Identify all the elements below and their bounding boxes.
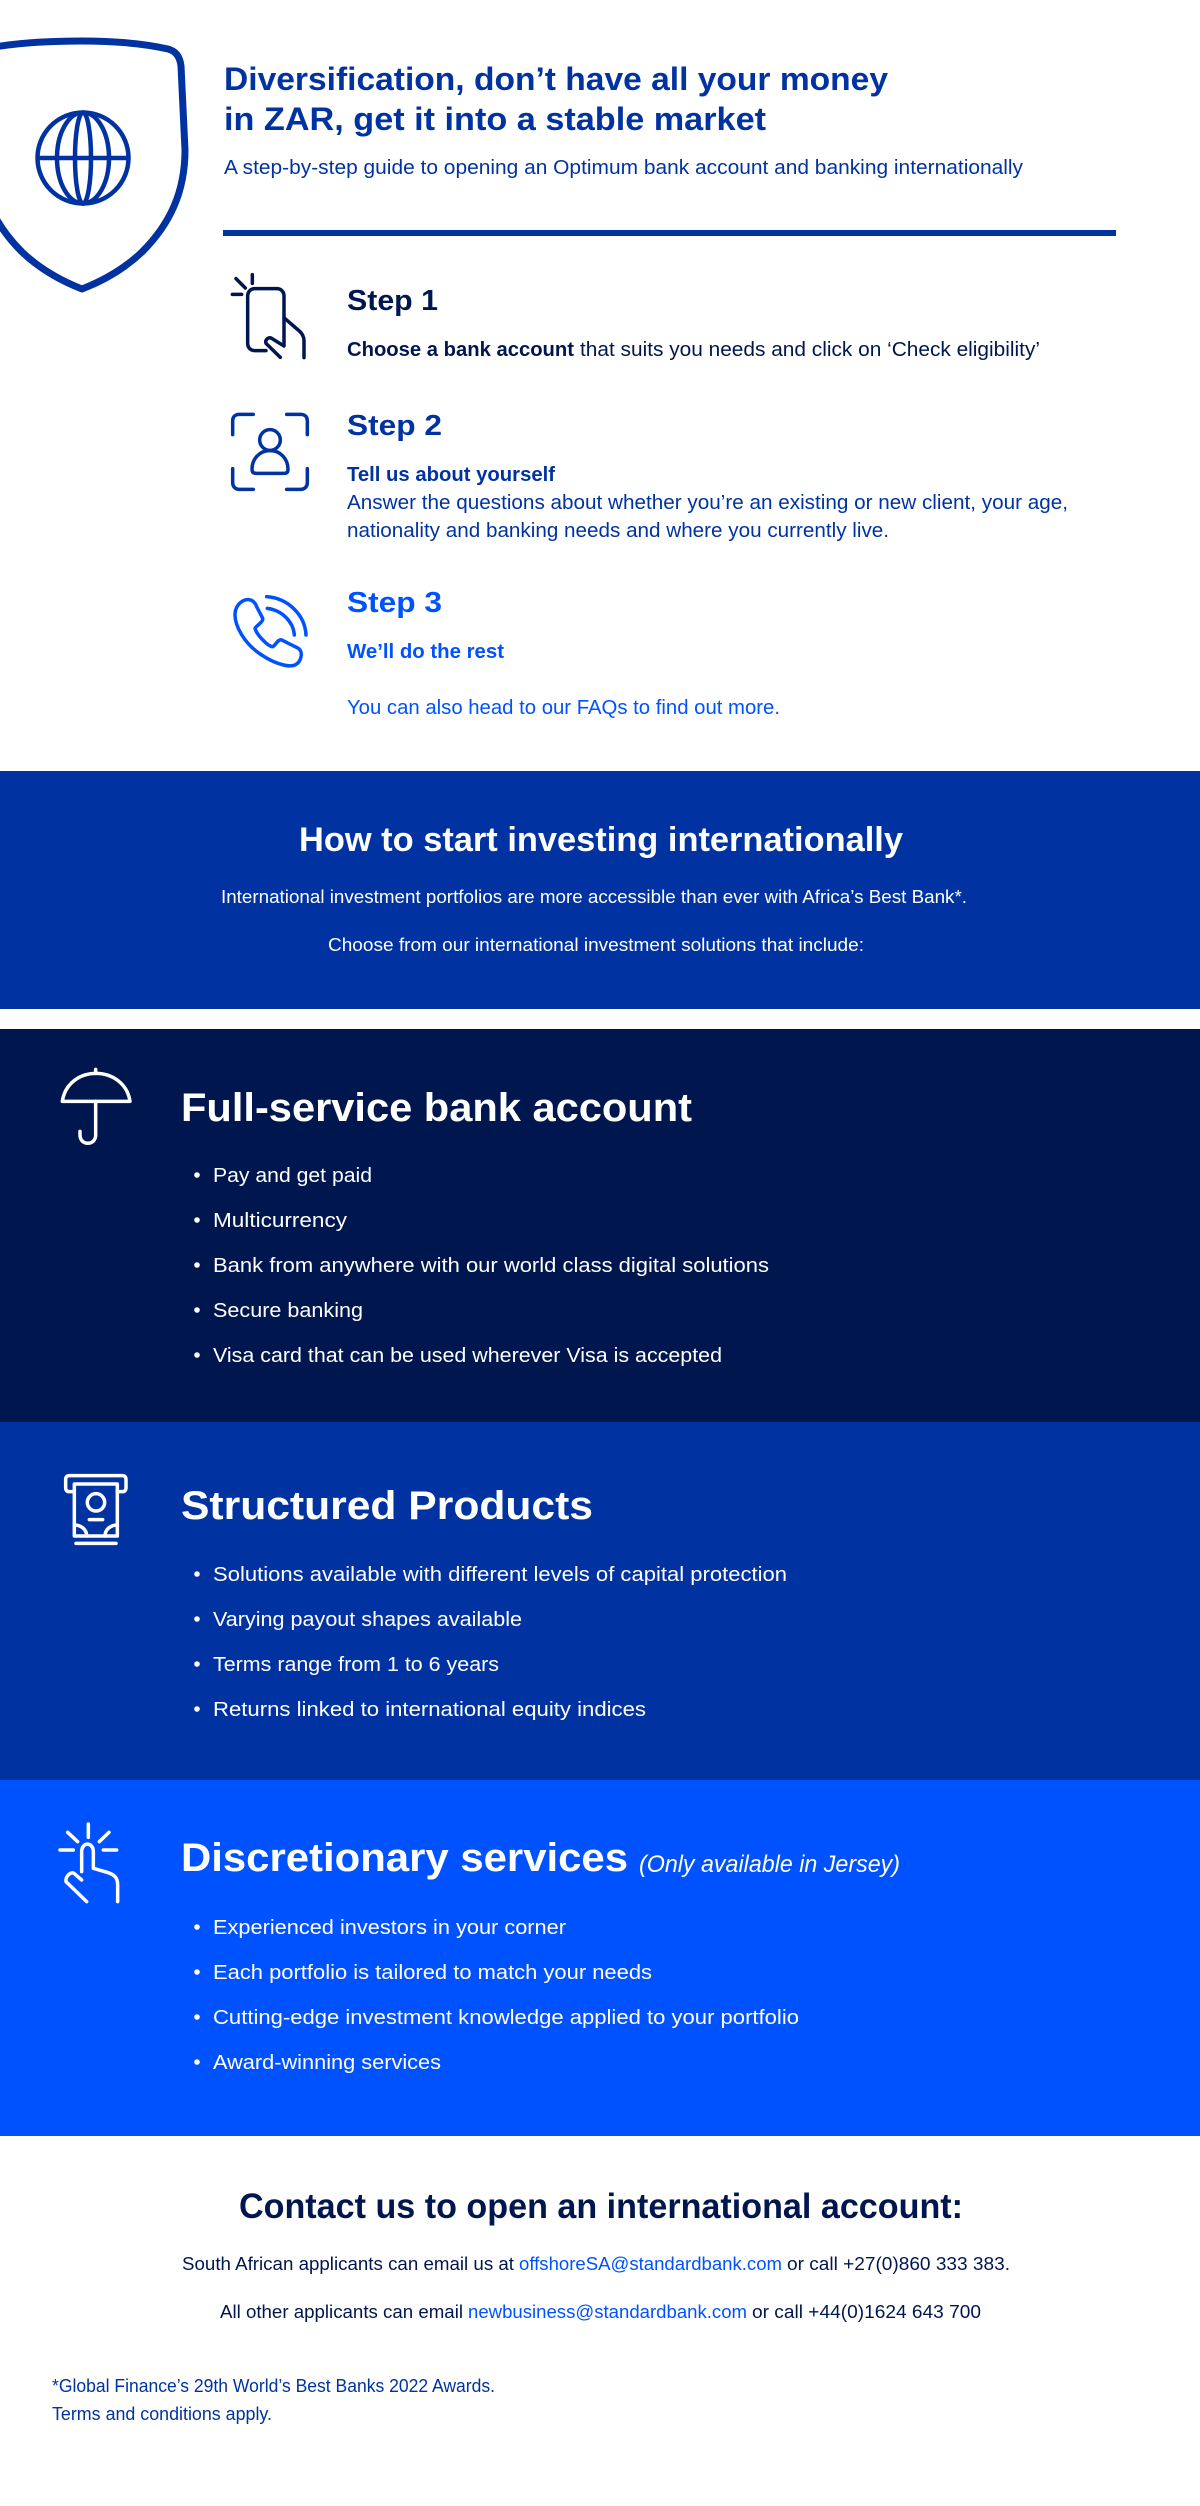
icon: shield with globe <box>0 41 185 289</box>
panel heading: How to start investing internationally <box>299 821 903 859</box>
heading <box>181 1836 900 1880</box>
heading: Structured Products <box>181 1484 593 1528</box>
bullet list: Terms range from 1 to 6 years <box>213 1654 499 1676</box>
bullet list: Cutting-edge investment knowledge applied to your portfolio <box>213 2007 799 2029</box>
heading: (Only available in Jersey) <box>639 1851 900 1878</box>
title: in ZAR, get it into a stable market <box>224 101 766 137</box>
panel intro text: International investment portfolios are more accessible than ever with Africa’s Best Bank*. <box>221 887 967 907</box>
footnote: Terms and conditions apply. <box>52 2404 272 2424</box>
bullet list: Bank from anywhere with our world class digital solutions <box>213 1255 769 1277</box>
step 1 text <box>347 339 1040 361</box>
subtitle: A step-by-step guide to opening an Optimum bank account and banking internationally <box>224 157 1023 179</box>
bullet list: Secure banking <box>213 1300 363 1322</box>
step 2 text: Tell us about yourself <box>347 464 555 486</box>
panel: structured products <box>0 1422 1200 1780</box>
bullet list: Experienced investors in your corner <box>213 1917 566 1939</box>
step 3 heading: Step 3 <box>347 587 442 619</box>
bullet list <box>194 1564 787 1721</box>
bullet list <box>194 1165 769 1367</box>
title: Diversification, don’t have all your money <box>224 61 888 97</box>
heading: Discretionary services <box>181 1836 628 1880</box>
icon: umbrella <box>62 1069 130 1143</box>
step 2 text: nationality and banking needs and where you currently live. <box>347 520 889 542</box>
panel intro text <box>221 887 967 955</box>
bullet list: Solutions available with different levels of capital protection <box>213 1564 787 1586</box>
icon: ATM <box>66 1476 126 1543</box>
step 1 text: that suits you needs and click on ‘Check eligibility’ <box>580 339 1040 361</box>
step 1 <box>232 275 1040 361</box>
bullet list: Award-winning services <box>213 2052 441 2074</box>
bullet list: Returns linked to international equity indices <box>213 1699 646 1721</box>
step 1 heading: Step 1 <box>347 285 438 317</box>
contact line: all other applicants: All other applicants can email <box>220 2302 463 2322</box>
footnote <box>52 2376 495 2424</box>
step 3 <box>235 587 780 719</box>
contact line: South African applicants: or call +27(0)860 333 383. <box>787 2254 1010 2274</box>
step 3 text: You can also head to our FAQs to find out more. <box>347 697 780 719</box>
panel intro text: Choose from our international investment solutions that include: <box>328 935 864 955</box>
contact line: all other applicants: newbusiness@standardbank.com <box>468 2302 747 2322</box>
step 1 text: Choose a bank account <box>347 339 574 361</box>
bullet list: Multicurrency <box>213 1210 347 1232</box>
bullet list: Varying payout shapes available <box>213 1609 522 1631</box>
icon: finger tap <box>60 1824 118 1902</box>
contact line: all other applicants <box>220 2302 981 2322</box>
icon: hand tapping phone <box>232 275 304 358</box>
contact line: South African applicants <box>182 2254 1010 2274</box>
icon: phone call <box>235 597 306 666</box>
contact line: all other applicants: or call +44(0)1624 643 700 <box>752 2302 981 2322</box>
step 3 text: We’ll do the rest <box>347 641 504 663</box>
bullet list: Each portfolio is tailored to match your needs <box>213 1962 652 1984</box>
footnote: *Global Finance’s 29th World’s Best Banks 2022 Awards. <box>52 2376 495 2396</box>
step 2 text <box>347 464 1068 542</box>
contact heading: Contact us to open an international account: <box>239 2187 963 2226</box>
panel: discretionary services <box>0 1780 1200 2136</box>
heading: Full-service bank account <box>181 1086 692 1130</box>
title <box>224 61 888 137</box>
contact line: South African applicants: offshoreSA@standardbank.com <box>519 2254 782 2274</box>
bullet list: Pay and get paid <box>213 1165 372 1187</box>
contact line: South African applicants: South African applicants can email us at <box>182 2254 514 2274</box>
panel: full-service bank account <box>0 1029 1200 1422</box>
step 3 text <box>347 641 780 719</box>
step 2 text: Answer the questions about whether you’re an existing or new client, your age, <box>347 492 1068 514</box>
panel: how to start investing <box>0 771 1200 1009</box>
step 2 heading: Step 2 <box>347 410 442 442</box>
step 2 <box>233 410 1068 542</box>
icon: user in scan frame <box>233 414 307 489</box>
bullet list: Visa card that can be used wherever Visa is accepted <box>213 1345 722 1367</box>
bullet list <box>194 1917 799 2074</box>
heading rule <box>223 230 1116 236</box>
